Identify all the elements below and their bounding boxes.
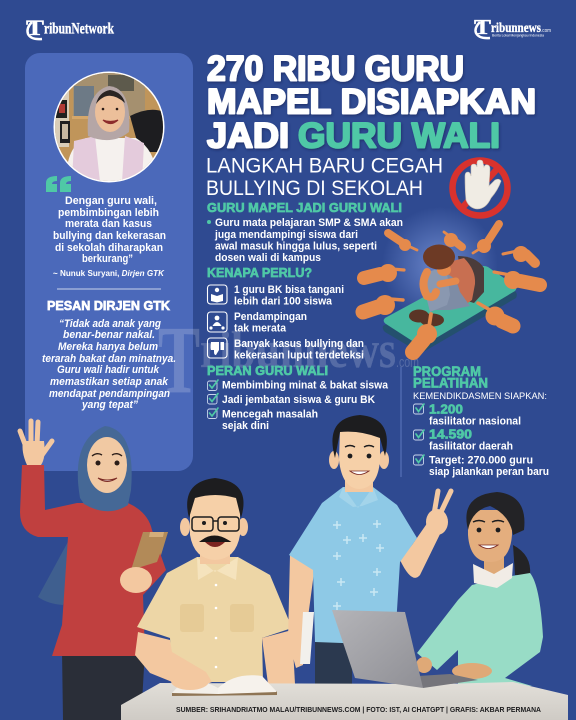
clipboard bbox=[119, 532, 168, 595]
program intro: KEMENDIKDASMEN SIAPKAN: bbox=[413, 391, 547, 402]
watermark: .com bbox=[396, 354, 419, 371]
role list: Mencegah masalah bbox=[222, 408, 318, 420]
logo: Tribunnews: ribunnews bbox=[491, 20, 541, 35]
panel: quote bbox=[25, 53, 193, 471]
hijab bbox=[78, 426, 132, 511]
message text: Mereka hanya belum bbox=[58, 341, 158, 353]
reason 1: lebih dari 100 siswa bbox=[234, 296, 333, 308]
pointing hand 6 bbox=[478, 303, 513, 326]
quote text bbox=[53, 195, 166, 265]
message text: benar-benar nakal. bbox=[63, 329, 155, 341]
icon: mentor group bbox=[208, 312, 227, 332]
title bbox=[207, 50, 536, 156]
quote text: bullying dan kekerasan bbox=[53, 230, 166, 242]
paper bbox=[300, 612, 314, 664]
pointing hand 4 bbox=[503, 246, 535, 263]
head bbox=[329, 415, 389, 492]
reason 1 bbox=[234, 284, 344, 308]
program list: fasilitator nasional bbox=[429, 416, 521, 428]
message text bbox=[42, 318, 176, 411]
message text: mendapat pendampingan bbox=[49, 388, 170, 400]
quote text: merata dan kasus bbox=[65, 218, 152, 230]
figure: woman in red bbox=[20, 421, 168, 720]
subtitle bbox=[206, 154, 443, 200]
logo: TribunNetwork bbox=[26, 15, 114, 40]
pointing hand 5 bbox=[494, 271, 540, 289]
logo: TribunNetwork: ribunNetwork bbox=[44, 20, 114, 38]
watermark: ribunnews bbox=[200, 322, 396, 379]
subtitle: BULLYING DI SEKOLAH bbox=[206, 177, 423, 200]
role list bbox=[208, 380, 389, 432]
message text: memastikan setiap anak bbox=[50, 376, 169, 388]
program list: siap jalankan peran baru bbox=[429, 466, 549, 478]
legs bbox=[425, 270, 470, 312]
open book bbox=[172, 675, 277, 696]
woman face details bbox=[92, 454, 122, 482]
logo: TribunNetwork: T bbox=[26, 15, 44, 40]
pointing hand 2 bbox=[444, 232, 462, 247]
title: MAPEL DISIAPKAN bbox=[207, 82, 536, 122]
title: 270 RIBU GURU bbox=[207, 50, 464, 88]
heading: peran guru wali: PERAN GURU WALI bbox=[207, 363, 328, 378]
pointing hand 3 bbox=[473, 224, 499, 253]
illustration: bullied student on phone bbox=[363, 207, 540, 352]
role list: Jadi jembatan siswa & guru BK bbox=[222, 394, 375, 406]
pointing hand 7 bbox=[413, 314, 437, 352]
head bbox=[423, 244, 455, 276]
quote text: Dengan guru wali, bbox=[65, 195, 157, 207]
source footer: SUMBER: SRIHANDRIATMO MALAU/TRIBUNNEWS.COM | FOTO: IST, AI CHATGPT | GRAFIS: AKBAR PERMANA bbox=[176, 707, 541, 714]
heading: program pelatihan: PELATIHAN bbox=[413, 374, 488, 390]
program list: 14.590 bbox=[429, 426, 472, 442]
victory hand bbox=[426, 491, 451, 535]
message text: terarah bakat dan minatnya. bbox=[42, 353, 176, 365]
title: JADI bbox=[207, 116, 289, 156]
heading: pesan dirjen: PESAN DIRJEN GTK bbox=[47, 298, 171, 313]
logo: Tribunnews: Berita Lokal Menjangkau Indonesia bbox=[492, 34, 544, 38]
arms bbox=[424, 272, 456, 297]
backpack bbox=[458, 256, 484, 303]
reason 3 bbox=[234, 338, 364, 362]
man hand on book bbox=[171, 672, 209, 690]
title: GURU WALI bbox=[298, 116, 500, 156]
logo: Tribunnews bbox=[474, 15, 551, 39]
program list bbox=[414, 402, 549, 478]
icon: quote mark bbox=[46, 176, 71, 192]
figure: girl in mint sweater bbox=[416, 492, 543, 686]
heading: program pelatihan bbox=[413, 363, 488, 390]
head bbox=[180, 478, 248, 564]
icon: thumbs down bbox=[208, 338, 227, 358]
subtitle: LANGKAH BARU CEGAH bbox=[206, 154, 443, 178]
program list: 1.200 bbox=[429, 402, 463, 416]
heading: kenapa perlu: KENAPA PERLU? bbox=[207, 265, 312, 280]
phone bbox=[383, 266, 517, 352]
icon: stop hand bbox=[452, 160, 508, 216]
logo: Tribunnews: T bbox=[474, 15, 491, 39]
reason 2: Pendampingan bbox=[234, 311, 307, 323]
bullet text: awal masuk hingga lulus, seperti bbox=[215, 240, 377, 252]
quote attribution: ~ Nunuk Suryani, Dirjen GTK bbox=[53, 268, 165, 278]
icon: reading student bbox=[208, 285, 227, 304]
pointing hand 1 bbox=[388, 233, 417, 251]
reason 1: 1 guru BK bisa tangani bbox=[234, 284, 344, 296]
bullet text: Guru mata pelajaran SMP & SMA akan bbox=[215, 217, 403, 229]
portrait photo bbox=[54, 72, 164, 182]
program list: Target: 270.000 guru bbox=[429, 454, 533, 466]
quote text: pembimbingan lebih bbox=[58, 207, 159, 219]
quote text: di sekolah diharapkan bbox=[55, 242, 163, 254]
watermark bbox=[158, 306, 419, 413]
logo: Tribunnews: .com bbox=[541, 28, 551, 34]
heading: guru mapel jadi guru wali: GURU MAPEL JADI GURU WALI bbox=[207, 200, 402, 215]
message text: “Tidak ada anak yang bbox=[59, 318, 161, 330]
watermark: T bbox=[158, 306, 200, 413]
bullet text bbox=[207, 217, 403, 264]
laptop bbox=[332, 610, 478, 688]
table bbox=[121, 682, 568, 720]
reason 2 bbox=[234, 311, 307, 334]
heading: program pelatihan: PROGRAM bbox=[413, 363, 481, 379]
bullet text: dosen wali di kampus bbox=[215, 252, 321, 264]
reason 2: tak merata bbox=[234, 322, 287, 334]
program list: fasilitator daerah bbox=[429, 440, 513, 452]
shoes bbox=[409, 310, 444, 326]
role list: Membimbing minat & bakat siswa bbox=[222, 380, 389, 392]
figure: man in blue shirt bbox=[288, 415, 451, 685]
bullet text: juga mendampingi siswa dari bbox=[214, 229, 358, 241]
figure: man with glasses bbox=[135, 478, 295, 690]
reason 3: Banyak kasus bullying dan bbox=[234, 338, 364, 350]
role list: sejak dini bbox=[222, 420, 269, 432]
waving hand bbox=[20, 421, 52, 465]
pointing hand 9 bbox=[363, 295, 403, 315]
pointing hand 8 bbox=[364, 264, 404, 282]
shirt bbox=[447, 258, 475, 307]
quote text: berkurang” bbox=[82, 253, 133, 265]
message text: Guru wali hadir untuk bbox=[57, 364, 160, 376]
reason 3: kekerasan luput terdeteksi bbox=[234, 350, 364, 362]
message text: yang tepat” bbox=[81, 399, 138, 411]
